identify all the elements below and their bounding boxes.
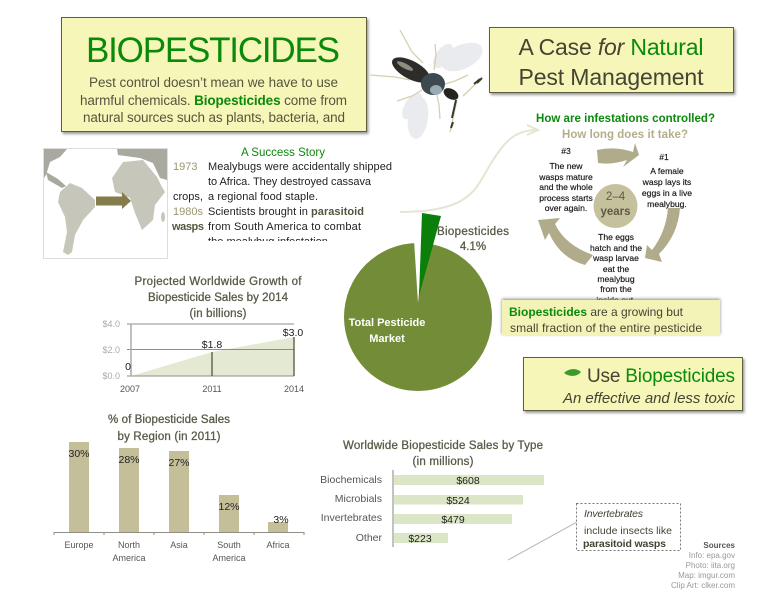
heading panel: a case for natural pest management [490, 28, 734, 92]
cycle heading: How long does it take? [562, 129, 688, 141]
step 3: over again. [545, 203, 587, 213]
step 2: eat the [603, 264, 629, 274]
success story: the mealybug infestation. [208, 236, 331, 248]
step 1: #1 [659, 152, 669, 162]
title panel [62, 18, 366, 132]
step 1: A female [650, 166, 684, 176]
step 2: inside out. [596, 295, 636, 305]
intro text: Pest control doesn’t mean we have to use [89, 75, 338, 90]
line chart: projected growth: 2011 [202, 384, 222, 394]
step 3: and the whole [539, 182, 593, 192]
pie label: total: Total Pesticide [349, 317, 425, 329]
intro text [80, 75, 347, 125]
step 3: process starts [539, 193, 593, 203]
callout: growing fraction: Biopesticides are a growing but [509, 305, 684, 319]
cycle heading: How are infestations controlled? [536, 113, 715, 125]
step 1: wasp lays its [642, 177, 691, 187]
bar chart: sales by type: $223 [408, 533, 432, 545]
line chart: projected growth: $0.0 [102, 371, 120, 381]
cycle arrow left [538, 218, 593, 265]
sources: Info: epa.gov [689, 551, 735, 560]
chart title: (in billions) [190, 308, 247, 320]
bar chart: sales by type: Worldwide Biopesticide Sales by Type [343, 440, 543, 452]
callout: growing fraction [502, 300, 720, 335]
step 1: eggs in a live [642, 188, 692, 198]
success story: 1980s [173, 206, 203, 218]
panel: use biopesticides: Use Biopesticides [587, 366, 735, 387]
sources: Photo: iita.org [686, 561, 735, 570]
line chart: projected growth: 2014 [284, 384, 304, 394]
line chart: projected growth: $4.0 [102, 319, 120, 329]
step 1: mealybug. [647, 199, 687, 209]
bar chart: sales by region: Europe [64, 540, 94, 550]
lifecycle diagram [538, 143, 692, 305]
bar chart: sales by region: North [118, 540, 140, 550]
step 3: #3 [561, 146, 571, 156]
bar chart: sales by region: by Region (in 2011) [118, 431, 221, 443]
bar chart: sales by region: South [217, 540, 241, 550]
panel: use biopesticides [524, 358, 742, 410]
bar chart: sales by type: Biochemicals [320, 474, 382, 486]
bar chart: sales by region: 27% [168, 457, 190, 469]
callout: invertebrates: include insects like [584, 525, 672, 537]
sources [671, 541, 736, 590]
pie label: total: Market [369, 333, 405, 345]
success story: A Success Story [241, 147, 325, 159]
bar chart: sales by region [54, 414, 304, 563]
bar chart: sales by region: 30% [68, 448, 90, 460]
center circle: years [600, 206, 631, 218]
line chart: projected growth: $2.0 [102, 345, 120, 355]
biopesticides slice [419, 213, 441, 296]
step 2: from the [600, 284, 632, 294]
line chart: projected growth: $1.8 [202, 339, 222, 351]
step 2: wasp larvae [592, 253, 639, 263]
chart title: Projected Worldwide Growth of [134, 276, 302, 288]
bar chart: sales by type: Other [356, 532, 382, 544]
success story: wasps [171, 221, 204, 233]
map: Americas to Africa [44, 148, 168, 258]
step 3 [538, 146, 593, 213]
sources: Map: imgur.com [678, 571, 735, 580]
center circle: 2–4 [606, 191, 626, 203]
sources: Clip Art: clker.com [671, 581, 735, 590]
line chart: projected growth: $3.0 [283, 327, 303, 339]
bar chart: sales by type: $479 [441, 514, 465, 526]
bar chart: sales by region: Africa [266, 540, 290, 550]
line chart: projected growth: 0 [125, 361, 131, 373]
callout: invertebrates: parasitoid wasps [583, 538, 666, 550]
bar chart: sales by region: % of Biopesticide Sales [108, 414, 230, 426]
success story [171, 147, 392, 248]
bar chart: sales by type: Invertebrates [321, 512, 382, 524]
step 2: mealybug [597, 274, 635, 284]
icon: leaf [564, 369, 581, 376]
success story: Mealybugs were accidentally shipped [208, 161, 392, 173]
chart title [134, 276, 302, 320]
step 2 [590, 234, 642, 300]
step 2: The eggs [598, 232, 634, 242]
sources: Sources [703, 541, 736, 550]
bar chart: sales by region: 3% [273, 514, 289, 526]
success story: 1973 [173, 161, 197, 173]
callout: growing fraction: small fraction of the entire pesticide [510, 321, 702, 335]
success story: crops, [173, 191, 203, 203]
success story: from South America to combat [208, 221, 361, 233]
icon: parasitoid wasp [370, 30, 487, 140]
intro text: harmful chemicals. Biopesticides come from [80, 93, 347, 108]
pie label: biopesticides: 4.1% [460, 241, 486, 253]
connector curve arrow [400, 125, 538, 212]
arrow on map [96, 192, 131, 209]
step 3: wasps mature [538, 172, 593, 182]
success story: a regional food staple. [208, 191, 318, 203]
bar chart: sales by region: 28% [118, 454, 140, 466]
step 2: hatch and the [590, 243, 642, 253]
bar chart: sales by type: $524 [446, 495, 470, 507]
bar chart: sales by region: Asia [170, 540, 188, 550]
panel: use biopesticides: An effective and less toxic [562, 390, 736, 407]
step 3: The new [550, 161, 583, 171]
title: BIOPESTICIDES [86, 31, 340, 70]
bar chart: sales by type [320, 440, 544, 547]
center circle [594, 184, 638, 228]
line chart: projected growth: 2007 [120, 384, 140, 394]
bar chart: sales by region: America [212, 553, 246, 563]
success story: to Africa. They destroyed cassava [208, 176, 372, 188]
pie chart [344, 213, 509, 391]
bar chart: sales by type: $608 [456, 475, 480, 487]
cycle arrow top [597, 143, 639, 167]
bar chart: sales by region: America [112, 553, 146, 563]
chart title: Biopesticide Sales by 2014 [148, 292, 289, 304]
cycle arrow right [645, 208, 680, 262]
bar chart: sales by region: 12% [218, 501, 240, 513]
heading panel: a case for natural pest management: Pest Management [518, 64, 704, 90]
callout: invertebrates [508, 504, 680, 560]
success story: Scientists brought in parasitoid [208, 206, 364, 218]
callout: invertebrates: Invertebrates [584, 508, 644, 520]
bar chart: sales by type: (in millions) [412, 456, 474, 468]
pie label: total [349, 317, 425, 345]
cycle heading [536, 113, 715, 141]
line chart: projected growth [102, 276, 304, 394]
intro text: natural sources such as plants, bacteria, and [83, 110, 345, 125]
pie label: biopesticides [437, 226, 509, 253]
bar chart: sales by type: Microbials [335, 493, 382, 505]
heading panel: a case for natural pest management: A Case for Natural [518, 34, 704, 60]
pie label: biopesticides: Biopesticides [437, 226, 509, 238]
step 1 [642, 152, 692, 209]
